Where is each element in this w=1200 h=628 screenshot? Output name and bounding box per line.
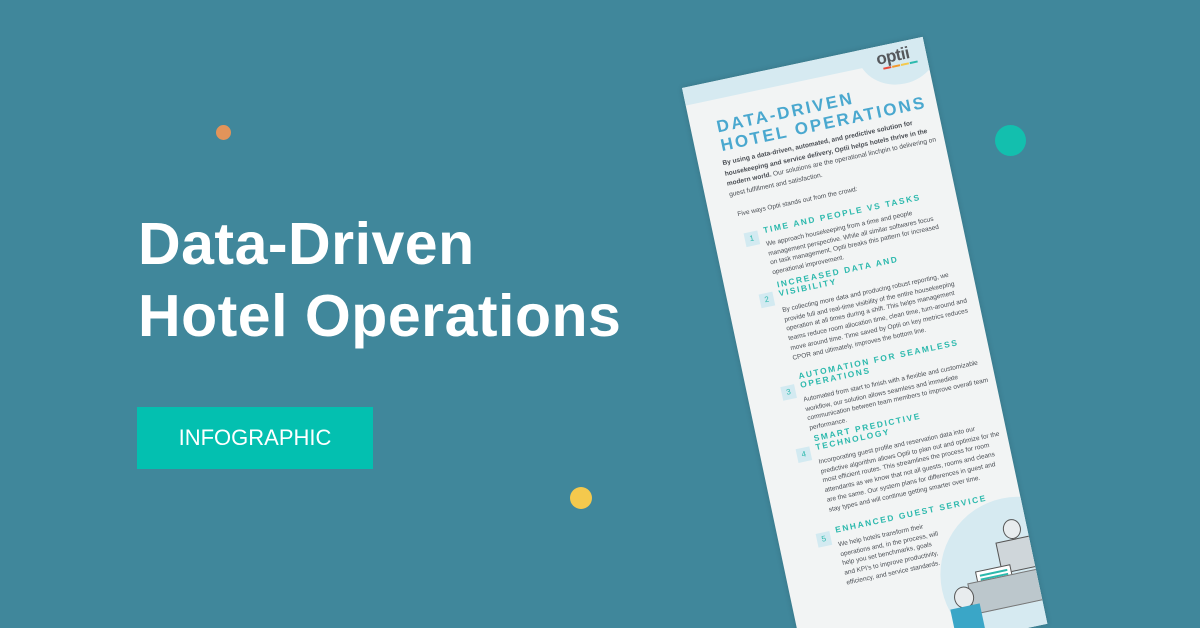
decorative dot yellow [570,487,592,509]
button: infographic: INFOGRAPHIC [179,425,331,450]
item 2 [759,292,775,308]
document preview: ENHANCED GUEST SERVICE [834,493,988,535]
doc title: DATA-DRIVEN [715,89,856,136]
item 2: 2 [764,295,770,304]
document preview: Incorporating guest profile and reservation data into our predictive algorithm allows Optii to plan out and optimize for the most efficient routes. This streamlines the process for room attendants as we know that not all guests, rooms and cleans are the same. Our system plans for differences in guest and stay types and will continue getting smarter over time. [818,426,1000,513]
document preview [682,37,1047,628]
decorative dot teal [995,125,1026,156]
title: Data-Driven [138,211,475,277]
item 3 [780,384,797,401]
item 4: 4 [801,449,807,459]
illustration: front desk [940,496,1048,628]
item 4 [796,446,812,463]
title [138,211,621,349]
item 5 [816,531,832,548]
logo circle [850,5,945,92]
item 1 [744,230,760,247]
document preview: Automated from start to finish with a flexible and customizable workflow, our solution allows seamless and immediate communication between team members to improve overall team performance. [803,360,989,432]
document preview: By collecting more data and producing robust reporting, we provide full and real-time visibility of the entire housekeeping operation at all times during a shift. This helps management teams reduce room allocation time, clean time, turn-around and move around time. Time saved by Optii on key metrics reduces CPOR and ultimately, improves the bottom line. [782,272,969,361]
intro paragraph: By using a data-driven, automated, and predictive solution for housekeeping and service delivery, Optii helps hotels thrive in the modern world. Our solutions are the operational linchpin to delivering on guest fulfillment and satisfaction. [722,120,937,198]
header band [682,37,926,106]
item 5: 5 [821,534,827,544]
logo: optii: optii [874,43,911,69]
document preview: AUTOMATION FOR SEAMLESS OPERATIONS [797,337,959,390]
document preview: TIME AND PEOPLE VS TASKS [762,192,922,235]
item 3: 3 [785,387,792,397]
button: infographic [137,407,373,469]
document preview: We approach housekeeping from a time and people management perspective. While all similar softwares focus on task management, Optii breaks this pattern for increased operational improvement. [766,210,940,276]
doc title: HOTEL OPERATIONS [719,93,928,155]
decorative dot orange [216,125,231,140]
document preview: We help hotels transform their operations and, in the process, will help you set benchmarks, goals and KPI's to improve productivity, efficiency, and service standards. [838,524,941,586]
document preview: Five ways Optii stands out from the crowd: [737,186,858,218]
document preview: SMART PREDICTIVE TECHNOLOGY [813,411,922,452]
title: Hotel Operations [138,283,621,349]
item 1: 1 [749,233,755,243]
document preview: INCREASED DATA AND VISIBILITY [776,254,899,298]
